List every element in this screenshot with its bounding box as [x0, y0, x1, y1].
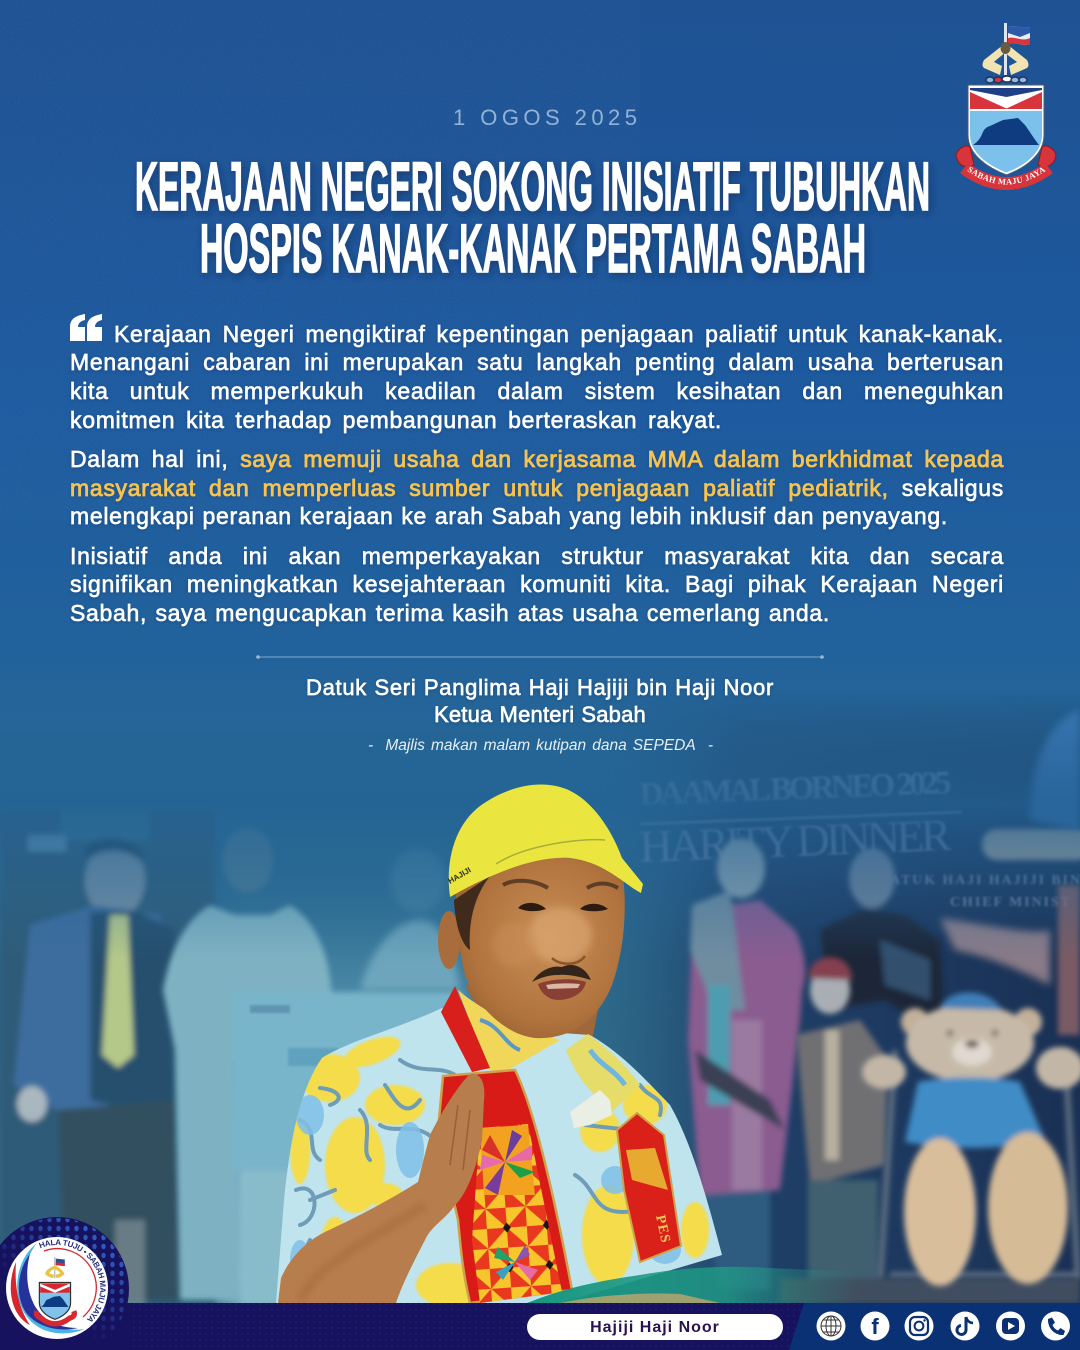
divider [256, 655, 824, 659]
footer dot texture [130, 1303, 805, 1350]
nose [552, 956, 585, 964]
background pale figures behind head [390, 848, 446, 912]
ribbon text: SABAH MAJU JAYA [967, 166, 1046, 185]
speaker name and post [306, 675, 774, 727]
floor and lower body left of person [240, 1170, 320, 1305]
badge halftone [2, 1218, 124, 1339]
finger lines [450, 1105, 470, 1170]
Mount Kinabalu [973, 118, 1039, 145]
quote paragraph 3 [70, 543, 1004, 628]
yellow cap [449, 784, 643, 897]
title [135, 148, 930, 287]
badge dark disc [0, 1217, 129, 1350]
left woman [163, 827, 332, 1300]
right edge person in blue [1030, 710, 1080, 830]
white undershirt [570, 1090, 612, 1128]
stage panel right [634, 706, 1080, 1303]
shield field [970, 111, 1042, 172]
arms holding pole [982, 45, 1028, 75]
icon: tiktok [950, 1312, 980, 1340]
badge swoosh: light blue [17, 1243, 84, 1333]
woven star lower [494, 1245, 538, 1280]
text: Dalam hal ini, saya memuji usaha dan kerjasama MMA dalam berkhidmat kepada [70, 446, 1004, 472]
face [456, 857, 625, 1038]
left sash panel [438, 1070, 572, 1303]
presentation board [232, 992, 462, 1170]
woven star upper [480, 1125, 535, 1195]
icon: facebook [860, 1312, 890, 1340]
badge: Hala Tuju logo [0, 1217, 129, 1339]
left red strap [441, 986, 490, 1072]
right edge decorated figure [1058, 885, 1080, 1035]
shield chief [970, 88, 1042, 109]
ear [438, 911, 460, 969]
hand and forearm [278, 1074, 484, 1303]
icon: website globe [816, 1312, 846, 1340]
quote paragraph 2 [70, 446, 1004, 530]
badge red ring [44, 1249, 96, 1317]
left collar [458, 990, 560, 1072]
sash lettering: PES [652, 1214, 673, 1245]
date: 1 OGOS 2025 [453, 105, 637, 130]
pill sign on stage [982, 829, 1080, 860]
text: Inisiatif anda ini akan memperkayakan struktur masyarakat kita dan secara [70, 543, 1004, 569]
backdrop text: chief minister: CHIEF MINIST [950, 895, 1071, 910]
shirt pattern [290, 1030, 709, 1307]
badge swoosh: navy [19, 1254, 78, 1329]
crest: Sabah coat of arms [956, 23, 1056, 190]
footer blue section [789, 1303, 1080, 1350]
moustache [532, 965, 591, 982]
teddy bear [862, 992, 1080, 1286]
right woman [688, 838, 805, 1290]
name pill [527, 1314, 783, 1340]
icon: instagram [904, 1312, 934, 1340]
green cloth at lectern [527, 1267, 860, 1303]
backdrop text: chief minister [890, 873, 1080, 910]
top fade over photo [0, 700, 1080, 960]
streak graphic on backdrop [940, 918, 1050, 985]
text: komitmen kita terhadap pembangunan berteraskan rakyat. [70, 407, 722, 433]
pale centre glow [220, 880, 480, 1310]
backdrop text: chief minister: ATUK HAJI HAJIJI BIN [890, 873, 1080, 888]
eyes [518, 903, 608, 911]
badge mini crest [36, 1257, 74, 1324]
shirt [276, 1008, 722, 1303]
name pill: Hajiji Haji Noor [590, 1319, 720, 1336]
child [796, 957, 888, 1290]
shield [968, 85, 1044, 175]
hair side [454, 876, 490, 950]
person: speaker in yellow cap [276, 784, 722, 1310]
quote paragraph 1 [70, 321, 1004, 434]
icon: video [996, 1312, 1025, 1340]
cap brim shade [496, 840, 605, 864]
text: Sabah, saya mengucapkan terima kasih atas usaha cemerlang anda. [70, 600, 830, 626]
text: Ketua Menteri Sabah [434, 702, 646, 727]
backdrop text: charity dinner: HARITY DINNER [638, 809, 952, 872]
text: Menangani cabaran ini merupakan satu langkah penting dalam usaha berterusan [70, 349, 1004, 375]
sash badge [626, 1148, 668, 1190]
left man [0, 810, 215, 1310]
cap label: HAJIJI [446, 865, 473, 886]
collar motif [480, 1020, 520, 1050]
flag [1008, 26, 1030, 45]
footer navy section [0, 1303, 815, 1350]
mouth [538, 979, 586, 1000]
icon: phone [1041, 1312, 1070, 1340]
text: melengkapi peranan kerajaan ke arah Sabah yang lebih inklusif dan penyayang. [70, 503, 948, 529]
backdrop text: event name: DA AMAL BORNEO 2025 [639, 765, 952, 813]
right man in black [820, 848, 945, 1040]
background: blurred event photo [0, 690, 1080, 1310]
quotation mark [70, 314, 102, 341]
text: signifikan meningkatkan kesejahteraan komuniti kita. Bagi pihak Kerajaan Negeri [70, 571, 1004, 597]
wheelchair [880, 1050, 1078, 1280]
text: Datuk Seri Panglima Haji Hajiji bin Haji Noor [306, 675, 774, 700]
event caption: - Majlis makan malam kutipan dana SEPEDA - [368, 737, 713, 754]
right sash [617, 1113, 681, 1262]
tan cloth strip [560, 1294, 720, 1303]
forearm shading [300, 1205, 425, 1300]
flag pole [1004, 23, 1007, 75]
paper grain texture [0, 0, 640, 520]
text: masyarakat dan memperluas sumber untuk penjagaan paliatif pediatrik, sekaligus [70, 475, 1004, 501]
ribbon ends [956, 146, 1056, 167]
collar motif right [590, 1050, 625, 1085]
footer bar [0, 1303, 1080, 1350]
text: kita untuk memperkukuh keadilan dalam sistem kesihatan dan meneguhkan [70, 378, 1004, 404]
badge swoosh: red [11, 1262, 30, 1325]
right collar [566, 1034, 640, 1112]
icon: facebook: f [871, 1314, 879, 1339]
shield chevron [970, 88, 1042, 108]
bead wreath [986, 76, 1027, 83]
neck [465, 985, 600, 1050]
backdrop line [640, 812, 962, 824]
ribbon [964, 168, 1049, 184]
badge ring text: HALA TUJU • SABAH MAJU JAYA [38, 1239, 106, 1322]
hands [1000, 42, 1010, 54]
floor strip [780, 1278, 1080, 1304]
face highlights [528, 907, 592, 963]
text: Kerajaan Negeri mengiktiraf kepentingan penjagaan paliatif untuk kanak-kanak. [114, 321, 1004, 347]
eyebrows [503, 881, 618, 888]
badge white disc [6, 1237, 108, 1339]
woven pattern panel [472, 1124, 562, 1303]
